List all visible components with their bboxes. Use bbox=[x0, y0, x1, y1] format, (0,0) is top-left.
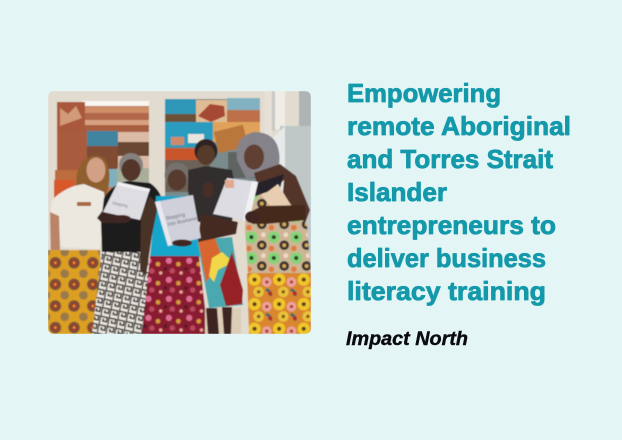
folder 1: Stepping bbox=[112, 200, 128, 208]
photo: five women holding folders bbox=[48, 91, 311, 334]
hands bbox=[113, 182, 259, 246]
organisation name: Impact North bbox=[346, 329, 468, 350]
left photo collage bbox=[54, 101, 149, 210]
heading: Empowering bbox=[347, 78, 501, 108]
heading: and Torres Strait bbox=[347, 144, 553, 174]
person 2 bbox=[92, 153, 162, 334]
person 1 bbox=[48, 156, 109, 334]
folder 3 bbox=[213, 178, 258, 221]
person 5 bbox=[237, 132, 311, 334]
folder 2: Into Business bbox=[167, 216, 198, 228]
fridge bbox=[273, 126, 311, 268]
heading: remote Aboriginal bbox=[347, 111, 571, 141]
folder 1 bbox=[103, 182, 150, 220]
heading: Islander bbox=[347, 177, 447, 207]
heading bbox=[347, 78, 571, 306]
wall bbox=[48, 91, 311, 334]
folder 2 bbox=[155, 195, 201, 246]
person 3 bbox=[140, 162, 208, 334]
heading: deliver business bbox=[347, 243, 546, 273]
folder 2: Stepping bbox=[165, 212, 186, 222]
right photo collage bbox=[165, 98, 260, 199]
infographic card bbox=[48, 82, 570, 350]
heading: entrepreneurs to bbox=[347, 210, 556, 240]
person 4 bbox=[188, 139, 243, 334]
heading: literacy training bbox=[347, 276, 546, 306]
